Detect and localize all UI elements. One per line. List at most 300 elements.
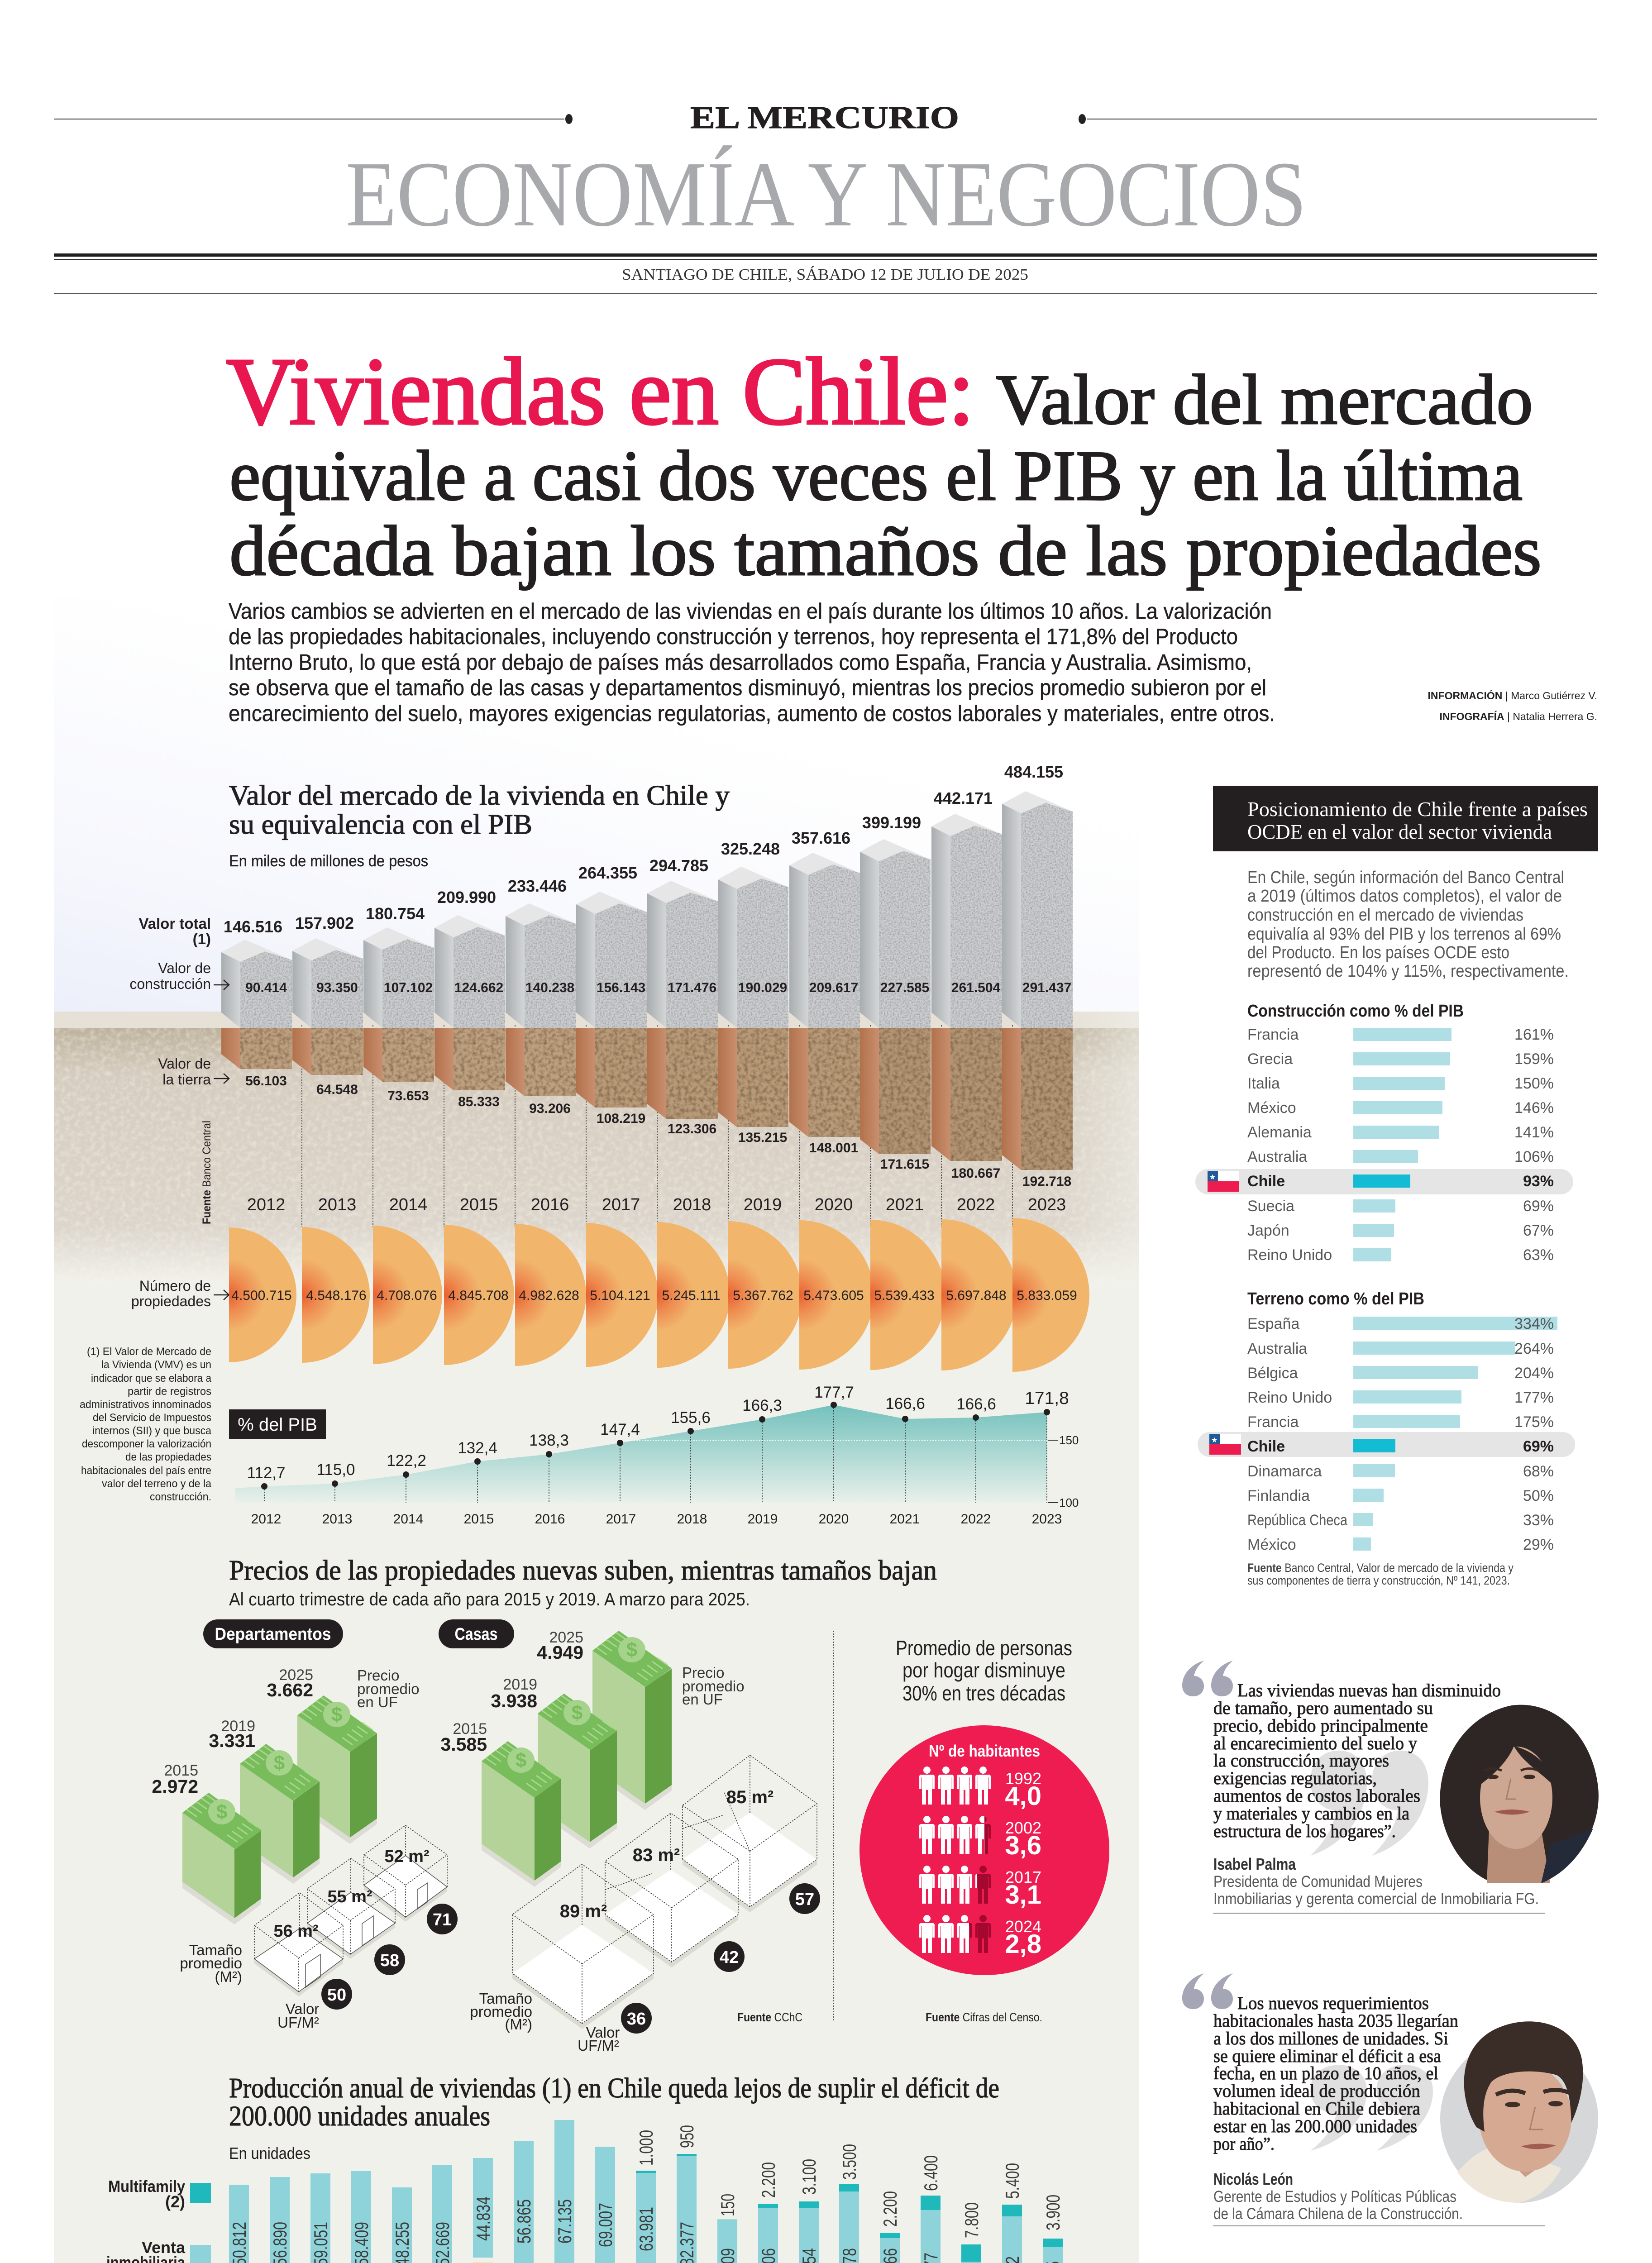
land value labels xyxy=(245,1074,1071,1189)
construction value labels: 156.143 xyxy=(597,980,645,995)
footnote VMV xyxy=(80,1346,212,1503)
house 2025: 85 m² xyxy=(726,1787,773,1807)
quote text xyxy=(1213,1680,1501,1841)
chart: land share of GDP: 68% xyxy=(1523,1463,1554,1480)
bar 2016: 150 xyxy=(717,2194,738,2216)
land value labels: 56.103 xyxy=(245,1074,287,1089)
quote text: volumen ideal de producción xyxy=(1213,2081,1420,2101)
bar 2011 xyxy=(513,2141,535,2263)
land value labels: 123.306 xyxy=(668,1122,716,1136)
price labels xyxy=(440,1629,745,1755)
people 2024 xyxy=(919,1915,991,1953)
year row: 2018 xyxy=(673,1195,711,1214)
chart: construction share of GDP: 63% xyxy=(1523,1246,1554,1264)
property counts: 5.539.433 xyxy=(874,1288,935,1303)
bar 2010: 44.834 xyxy=(473,2196,494,2241)
price labels: 2.972 xyxy=(152,1776,198,1797)
bar 2024: 3.900 xyxy=(1042,2195,1064,2230)
total value labels: 294.785 xyxy=(649,856,708,875)
footnote VMV: descomponer la valorización xyxy=(82,1438,211,1450)
year values xyxy=(1005,1769,1041,1959)
quote text: a los dos millones de unidades. Si xyxy=(1213,2028,1448,2048)
property counts: 5.697.848 xyxy=(946,1288,1007,1303)
newspaper name: EL MERCURIO xyxy=(690,100,959,135)
construction value labels: 140.238 xyxy=(525,980,574,995)
column 2015 xyxy=(434,915,505,1090)
chart years: 2018 xyxy=(677,1512,707,1527)
chart years: 2012 xyxy=(251,1512,281,1527)
chart: land share of GDP: 50% xyxy=(1523,1487,1554,1504)
chart years: 2019 xyxy=(748,1512,778,1527)
heading: annual production xyxy=(229,2073,999,2163)
axis labels: UF/M² xyxy=(578,2037,619,2054)
stack 2025 xyxy=(592,1631,672,1810)
quote text: Los nuevos requerimientos xyxy=(1237,1993,1429,2013)
bar 2018: 3.100 xyxy=(798,2159,820,2195)
bar 2015: 950 xyxy=(676,2125,697,2148)
value badges xyxy=(321,1904,458,2010)
year row: 2013 xyxy=(318,1195,356,1214)
persons per household heading: 30% en tres décadas xyxy=(902,1681,1065,1705)
people 1992 xyxy=(919,1766,991,1805)
attribution: Gerente de Estudios y Políticas Públicas xyxy=(1213,2188,1456,2206)
bar 2009 xyxy=(432,2165,453,2263)
value labels: 177,7 xyxy=(814,1384,854,1401)
attribution: Presidenta de Comunidad Mujeres xyxy=(1213,1873,1423,1891)
chart: land share of GDP: Francia xyxy=(1247,1413,1299,1431)
apartment 2015: 56 m² xyxy=(273,1922,319,1941)
apartment 2025: 52 m² xyxy=(384,1847,430,1866)
construction value labels: 190.029 xyxy=(738,980,787,995)
total value labels: 209.990 xyxy=(437,888,496,907)
footnote VMV: valor del terreno y de la xyxy=(102,1478,212,1490)
chart: construction share of GDP: Reino Unido xyxy=(1247,1246,1332,1264)
land value labels: 192.718 xyxy=(1022,1174,1071,1189)
source rotated: Fuente Banco Central xyxy=(201,1121,213,1224)
headline: Valor del mercado xyxy=(996,360,1533,439)
intro paragraph: equivalía al 93% del PIB y los terrenos al 69% xyxy=(1247,925,1561,944)
chart years: 2017 xyxy=(606,1512,636,1527)
apartment 2019 xyxy=(307,1858,395,1959)
land value labels: 171.615 xyxy=(880,1157,929,1172)
column 2019 xyxy=(718,867,788,1127)
year values: 2024 xyxy=(1005,1917,1041,1936)
chart: construction share of GDP: Francia xyxy=(1247,1026,1299,1043)
chart years: 2020 xyxy=(819,1512,849,1527)
headline: década bajan los tamaños de las propiedades xyxy=(229,511,1542,591)
chart: construction share of GDP: Construcción como % del PIB xyxy=(1247,1002,1464,1021)
total value labels: 233.446 xyxy=(508,877,567,895)
heading: annual production: Producción anual de viviendas (1) en Chile queda lejos de suplir el déficit de xyxy=(229,2073,999,2104)
property counts: 4.982.628 xyxy=(519,1288,579,1303)
year row: 2022 xyxy=(957,1195,995,1214)
bar 2022: 7.800 xyxy=(961,2202,982,2238)
chart: land share of GDP: Dinamarca xyxy=(1247,1463,1322,1480)
footnote VMV: indicador que se elabora a xyxy=(91,1372,212,1385)
left row labels: propiedades xyxy=(131,1293,211,1309)
chart: land share of GDP: Australia xyxy=(1247,1340,1307,1357)
axis labels: (M²) xyxy=(505,2016,532,2033)
chart: land share of GDP: Reino Unido xyxy=(1247,1389,1332,1406)
axis labels: promedio xyxy=(180,1955,242,1972)
total value labels: 484.155 xyxy=(1004,763,1063,781)
footnote VMV: habitacionales del país entre xyxy=(81,1465,211,1477)
heading: prices: Al cuarto trimestre de cada año para 2015 y 2019. A marzo para 2025. xyxy=(229,1590,750,1609)
persons per household heading: Promedio de personas xyxy=(896,1636,1072,1660)
chart: construction share of GDP: 141% xyxy=(1514,1124,1554,1141)
footnote VMV: partir de registros xyxy=(128,1385,211,1398)
people 2002 xyxy=(919,1816,991,1854)
quote text: precio, debido principalmente xyxy=(1213,1715,1428,1736)
chart: land share of GDP: Chile xyxy=(1247,1438,1285,1455)
half circles xyxy=(229,1218,1089,1372)
price labels: promedio xyxy=(357,1681,420,1697)
construction value labels: 291.437 xyxy=(1022,980,1071,995)
property counts: 5.245.111 xyxy=(662,1288,721,1303)
bar 2018 xyxy=(798,2159,820,2263)
section name: ECONOMÍA Y NEGOCIOS xyxy=(346,142,1307,246)
price labels: en UF xyxy=(357,1694,398,1710)
year row: 2017 xyxy=(602,1195,640,1214)
panel heading: Posicionamiento de Chile frente a países xyxy=(1247,797,1588,821)
attribution: de la Cámara Chilena de la Construcción. xyxy=(1213,2205,1463,2223)
axis labels xyxy=(180,1942,319,2031)
column 2014 xyxy=(363,927,434,1082)
year row: 2023 xyxy=(1028,1195,1066,1214)
apartment 2015 xyxy=(254,1893,343,1996)
quote text: estructura de los hogares”. xyxy=(1213,1821,1396,1841)
bar 2020: 2.200 xyxy=(879,2191,901,2227)
chart: land share of GDP: 33% xyxy=(1523,1512,1554,1529)
chart: construction share of GDP: Grecia xyxy=(1247,1050,1293,1068)
column 2022 xyxy=(931,814,1002,1161)
chart: construction share of GDP: 146% xyxy=(1514,1099,1554,1117)
value labels: 147,4 xyxy=(600,1421,640,1438)
quote text: se quiere eliminar el déficit a esa xyxy=(1213,2046,1441,2066)
legend: production chart: Multifamily xyxy=(108,2177,185,2196)
pill: houses xyxy=(439,1619,514,1648)
land value labels: 108.219 xyxy=(597,1111,645,1126)
left row labels: construcción xyxy=(129,976,211,992)
quote text: estar en las 200.000 unidades xyxy=(1213,2116,1417,2136)
dotted year guides xyxy=(302,1025,1012,1227)
arrows xyxy=(214,980,229,1300)
property counts: 4.548.176 xyxy=(306,1288,367,1303)
bar 2021 xyxy=(920,2155,941,2263)
property counts: 4.845.708 xyxy=(448,1288,509,1303)
axis labels: promedio xyxy=(470,2003,532,2020)
chart: land share of GDP: España xyxy=(1247,1315,1299,1332)
year row: 2015 xyxy=(460,1195,498,1214)
chart: land share of GDP: 264% xyxy=(1514,1340,1554,1357)
chart: land share of GDP: 29% xyxy=(1523,1536,1554,1553)
legend: production chart: Venta xyxy=(142,2238,186,2257)
house 2019: 83 m² xyxy=(633,1845,680,1865)
property counts: 4.708.076 xyxy=(377,1288,437,1303)
footnote VMV: construcción. xyxy=(150,1491,211,1503)
axis labels: 150 xyxy=(1059,1433,1079,1447)
bar 2017: 2.200 xyxy=(758,2162,779,2198)
credits xyxy=(1428,689,1597,722)
bar 2020 xyxy=(879,2191,901,2263)
house 2019 xyxy=(605,1813,738,1967)
bar 2013: 69.007 xyxy=(595,2203,616,2247)
year row: 2016 xyxy=(531,1195,569,1214)
graphic: house price stacks xyxy=(440,1629,745,1887)
source census: Fuente Cifras del Censo. xyxy=(926,2010,1042,2024)
chart: construction share of GDP: 159% xyxy=(1514,1050,1554,1068)
legend: production chart: (2) xyxy=(165,2192,185,2211)
stack 2015 xyxy=(482,1741,561,1887)
portrait: Isabel Palma xyxy=(1440,1705,1599,1883)
intro paragraph: del Producto. En los países OCDE esto xyxy=(1247,943,1509,962)
chart: land share of GDP: Finlandia xyxy=(1247,1487,1310,1504)
headline: Viviendas en Chile: xyxy=(226,338,974,444)
construction value labels xyxy=(245,980,1071,995)
footnote VMV: internos (SII) y que busca xyxy=(92,1425,212,1437)
chart: construction share of GDP: Japón xyxy=(1247,1222,1289,1239)
chart: annual housing production xyxy=(229,2120,1064,2263)
quote text: habitacional en Chile debiera xyxy=(1213,2098,1420,2119)
chart years: 2015 xyxy=(464,1512,494,1527)
bar 2012: 67.135 xyxy=(554,2199,575,2244)
portrait: Nicolás León xyxy=(1440,2021,1598,2203)
value labels: 138,3 xyxy=(529,1432,569,1449)
chart years: 2016 xyxy=(535,1512,565,1527)
stack 2025 xyxy=(297,1695,377,1844)
chart years: 2013 xyxy=(322,1512,352,1527)
chart: construction share of GDP: Italia xyxy=(1247,1075,1280,1092)
chart: land share of GDP: México xyxy=(1247,1536,1296,1553)
value badges xyxy=(621,1883,820,2034)
chart: construction share of GDP: Australia xyxy=(1247,1148,1307,1165)
left row labels: la tierra xyxy=(162,1071,211,1088)
total value labels: 157.902 xyxy=(295,914,354,932)
axis labels xyxy=(470,1990,620,2054)
circle: inhabitants per household: Nº de habitantes xyxy=(929,1742,1040,1760)
quote text: habitacionales hasta 2035 llegarían xyxy=(1213,2010,1458,2031)
intro paragraph: En Chile, según información del Banco Central xyxy=(1247,868,1564,887)
bar 2016 xyxy=(717,2194,738,2263)
stack 2015 xyxy=(182,1793,262,1924)
chart years: 2022 xyxy=(961,1512,991,1527)
year values: 2017 xyxy=(1005,1868,1041,1886)
bar 2023 xyxy=(1002,2163,1023,2263)
value badges: 57 xyxy=(795,1890,814,1909)
land value labels: 73.653 xyxy=(387,1089,429,1103)
left row labels: Número de xyxy=(139,1278,211,1294)
chart: construction share of GDP: 93% xyxy=(1523,1173,1554,1190)
flag of Chile xyxy=(1209,1434,1241,1455)
property counts: 5.367.762 xyxy=(733,1288,793,1303)
construction value labels: 171.476 xyxy=(668,980,716,995)
price labels: 2025 xyxy=(549,1629,583,1646)
attribution: Isabel Palma xyxy=(1213,1855,1296,1873)
chart: land share of GDP: 334% xyxy=(1514,1315,1554,1332)
left row labels: Valor de xyxy=(158,960,211,976)
bar 2013 xyxy=(595,2147,616,2263)
tag: percent of GDP: % del PIB xyxy=(238,1415,317,1435)
price labels: 2019 xyxy=(503,1676,537,1693)
intro text: Varios cambios se advierten en el mercado de las viviendas en el país durante los últimos 10 años. La valorización xyxy=(229,599,1272,624)
column 2013 xyxy=(292,938,363,1075)
bar 2014: 63.981 xyxy=(635,2207,657,2251)
intro text: encarecimiento del suelo, mayores exigencias regulatorias, aumento de costos laborales y materiales, entre otros. xyxy=(229,702,1275,726)
bar 2014: 1.000 xyxy=(635,2130,657,2166)
axis labels: 100 xyxy=(1059,1496,1079,1509)
chart: columns construction and land value xyxy=(221,791,1073,1170)
chart: land share of GDP: 175% xyxy=(1514,1413,1554,1431)
bar 2019 xyxy=(839,2144,860,2263)
heading: market value: su equivalencia con el PIB xyxy=(229,809,532,840)
heading: market value: Valor del mercado de la vivienda en Chile y xyxy=(229,780,730,811)
value labels: 171,8 xyxy=(1025,1389,1069,1408)
panel heading: OCDE en el valor del sector vivienda xyxy=(1247,820,1552,843)
bar 2022 xyxy=(961,2202,982,2263)
date: SANTIAGO DE CHILE, SÁBADO 12 DE JULIO DE 2025 xyxy=(622,266,1028,283)
value labels: 166,3 xyxy=(742,1397,782,1414)
chart: construction share of GDP: 106% xyxy=(1514,1148,1554,1165)
property counts: 5.473.605 xyxy=(803,1288,864,1303)
opening quote mark xyxy=(1182,1661,1233,1696)
bar 2007 xyxy=(351,2171,372,2263)
intro text: de las propiedades habitacionales, incluyendo construcción y terrenos, hoy representa el 171,8% del Producto xyxy=(229,625,1238,649)
pill: apartments: Departamentos xyxy=(215,1625,331,1644)
graphic: apartment sizes xyxy=(180,1825,458,2031)
value labels xyxy=(247,1384,1069,1482)
chart: land share of GDP: Terreno como % del PIB xyxy=(1247,1289,1424,1308)
price labels: promedio xyxy=(682,1678,745,1695)
flag of Chile xyxy=(1208,1171,1239,1192)
chart: land share of GDP: 177% xyxy=(1514,1389,1554,1406)
chart: construction share of GDP: México xyxy=(1247,1099,1296,1117)
quote text: y materiales y cambios en la xyxy=(1213,1803,1409,1824)
divider xyxy=(833,1631,834,2020)
flag of Chile: ★ xyxy=(1211,1437,1218,1444)
house 2025 xyxy=(683,1755,817,1912)
chart: land share of GDP: Bélgica xyxy=(1247,1365,1298,1382)
column 2016 xyxy=(506,903,576,1096)
price labels xyxy=(152,1666,420,1797)
land value labels: 85.333 xyxy=(458,1094,500,1109)
chart: construction share of GDP: Suecia xyxy=(1247,1198,1294,1215)
construction value labels: 93.350 xyxy=(316,980,358,995)
stack 2019 xyxy=(538,1694,617,1848)
bar 2024 xyxy=(1042,2195,1064,2263)
chart: number of properties half circles xyxy=(229,1218,1089,1372)
land value labels: 180.667 xyxy=(951,1166,1000,1181)
bar 2019: 3.500 xyxy=(839,2144,860,2180)
column 2021 xyxy=(860,839,931,1154)
intro paragraph: representó de 104% y 115%, respectivamente. xyxy=(1247,962,1569,981)
intro paragraph: a 2019 (últimos datos completos), el valor de xyxy=(1247,887,1562,906)
axis labels: Valor xyxy=(286,2000,319,2017)
total value labels: 146.516 xyxy=(224,917,282,936)
quote: Nicolás León xyxy=(1182,1973,1598,2226)
price labels: 4.949 xyxy=(537,1642,583,1663)
chart: construction share of GDP: 161% xyxy=(1514,1026,1554,1043)
total value labels: 399.199 xyxy=(862,813,921,832)
year row: 2020 xyxy=(815,1195,853,1214)
source xyxy=(1247,1561,1514,1587)
left row labels: (1) xyxy=(193,931,211,947)
heading: annual production: 200.000 unidades anuales xyxy=(229,2101,490,2132)
quote text: exigencias regulatorias, xyxy=(1213,1768,1377,1788)
quote text: la construcción, mayores xyxy=(1213,1750,1389,1771)
chart years xyxy=(251,1512,1062,1527)
intro text: se observa que el tamaño de las casas y departamentos disminuyó, mientras los precios promedio subieron por el xyxy=(229,676,1266,700)
year values: 2002 xyxy=(1005,1819,1041,1837)
year values: 1992 xyxy=(1005,1769,1041,1788)
chart: land share of GDP: 204% xyxy=(1514,1365,1554,1382)
intro paragraph xyxy=(1247,868,1569,981)
value labels: 166,6 xyxy=(885,1395,925,1413)
year values: 4,0 xyxy=(1005,1781,1041,1811)
bar 2006 xyxy=(310,2173,331,2263)
chart: construction share of GDP: Chile xyxy=(1247,1173,1285,1190)
total value labels xyxy=(224,763,1063,936)
price labels: 2019 xyxy=(221,1718,255,1735)
construction value labels: 124.662 xyxy=(454,980,503,995)
value badges: 42 xyxy=(720,1948,739,1967)
price labels: Precio xyxy=(682,1664,725,1681)
graphic: house sizes xyxy=(470,1755,820,2054)
background quote mark xyxy=(1310,1751,1428,1856)
value labels: 155,6 xyxy=(671,1409,711,1427)
price labels: en UF xyxy=(682,1691,723,1708)
heading: market value xyxy=(229,780,730,870)
year row xyxy=(247,1195,1066,1214)
stack 2019 xyxy=(240,1744,320,1884)
total value labels: 264.355 xyxy=(578,864,637,882)
chart: construction share of GDP: 150% xyxy=(1514,1075,1554,1092)
value labels: 115,0 xyxy=(317,1461,355,1479)
panel: OECD positioning xyxy=(1195,786,1598,1587)
footnote VMV: administrativos innominados xyxy=(80,1399,211,1411)
bar 2021: 6.400 xyxy=(920,2155,941,2191)
headline xyxy=(226,338,1542,591)
column 2020 xyxy=(789,853,860,1137)
value labels: 122,2 xyxy=(387,1452,426,1470)
masthead xyxy=(54,100,1597,294)
chart: land share of GDP: 69% xyxy=(1523,1438,1554,1455)
house 2015 xyxy=(512,1864,654,2029)
value labels: 132,4 xyxy=(458,1439,497,1457)
construction value labels: 227.585 xyxy=(880,980,929,995)
axis labels: UF/M² xyxy=(277,2014,319,2031)
chart: land share of GDP xyxy=(1198,1289,1575,1553)
quote text: al encarecimiento del suelo y xyxy=(1213,1733,1417,1753)
value badges: 58 xyxy=(380,1951,399,1970)
property counts: 5.833.059 xyxy=(1017,1288,1077,1303)
year row: 2019 xyxy=(744,1195,782,1214)
price labels: 3.938 xyxy=(491,1690,537,1711)
source: Fuente CChC xyxy=(737,2010,802,2024)
price labels: 3.331 xyxy=(209,1730,255,1751)
intro paragraph: construcción en el mercado de viviendas xyxy=(1247,906,1523,925)
circle: inhabitants per household xyxy=(859,1725,1109,1975)
bar 2005 xyxy=(269,2177,291,2263)
bar 2023: 5.400 xyxy=(1002,2163,1023,2199)
apartment 2025 xyxy=(364,1825,447,1922)
flag of Chile: ★ xyxy=(1209,1174,1216,1181)
quote text: aumentos de costos laborales xyxy=(1213,1786,1420,1806)
left row labels: Valor de xyxy=(158,1055,211,1072)
quote text: Las viviendas nuevas han disminuido xyxy=(1237,1680,1501,1700)
value badges: 71 xyxy=(433,1910,452,1929)
price labels: Precio xyxy=(357,1667,400,1684)
price labels: 2015 xyxy=(453,1720,487,1738)
